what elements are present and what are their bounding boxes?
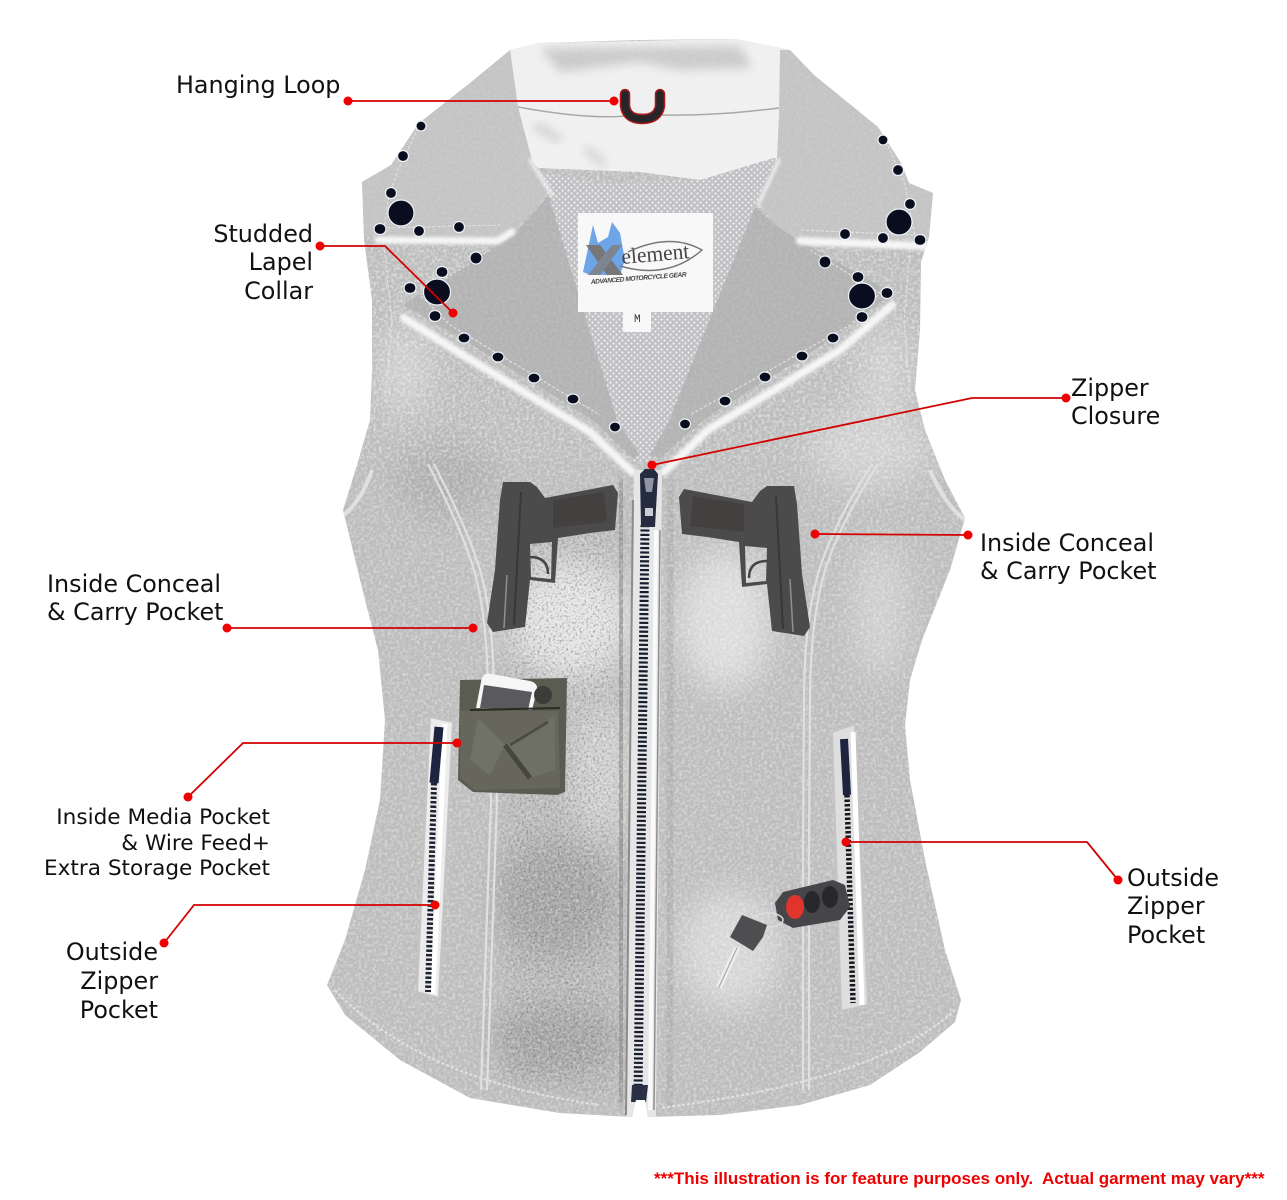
callout: studded lapel collar: Studded	[213, 220, 313, 248]
lapel highlights	[378, 160, 925, 472]
zipper slider	[640, 469, 658, 527]
callout: inside conceal carry pocket right	[810, 529, 1157, 585]
mesh lining	[538, 157, 777, 462]
hanging loop	[625, 94, 660, 119]
callout: studded lapel collar	[213, 220, 458, 318]
callout: inside media pocket: Inside Media Pocket	[56, 805, 270, 830]
collar back and inner band	[510, 39, 790, 180]
callout: studded lapel collar: Collar	[244, 277, 313, 305]
callout: outside zipper pocket right: Pocket	[1127, 921, 1205, 949]
callout: inside conceal carry pocket right: & Carry Pocket	[980, 557, 1157, 585]
callout: inside media pocket	[44, 738, 462, 881]
upper collar right	[760, 50, 933, 238]
brand label: element	[620, 238, 690, 269]
callout: inside conceal carry pocket left: Inside Conceal	[47, 570, 221, 598]
left handgun	[487, 482, 618, 632]
brand label: ADVANCED MOTORCYCLE GEAR	[590, 271, 687, 286]
right zipper pocket	[832, 724, 868, 1011]
callout: inside conceal carry pocket left	[47, 570, 478, 632]
callout: hanging loop: Hanging Loop	[176, 71, 340, 99]
callout: inside media pocket: Extra Storage Pocket	[44, 856, 270, 881]
right lapel	[650, 207, 893, 458]
vest illustration	[320, 30, 970, 1125]
size tag: M	[634, 314, 641, 326]
callout: outside zipper pocket left: Zipper	[80, 967, 158, 995]
callout: outside zipper pocket right: Outside	[1127, 864, 1219, 892]
callout: studded lapel collar: Lapel	[249, 248, 313, 276]
callout: outside zipper pocket right	[842, 838, 1219, 949]
studs	[374, 121, 926, 432]
upper collar left	[362, 50, 552, 238]
callout: inside media pocket: & Wire Feed+	[121, 831, 270, 856]
callout: zipper closure: Closure	[1071, 402, 1160, 430]
key fob and key	[719, 880, 850, 987]
callout: outside zipper pocket left: Pocket	[80, 996, 158, 1024]
brand label	[578, 213, 713, 332]
callout: zipper closure: Zipper	[1071, 374, 1149, 402]
callout: outside zipper pocket right: Zipper	[1127, 892, 1205, 920]
left zipper pocket	[417, 717, 453, 998]
princess seams	[335, 464, 965, 1108]
callout: outside zipper pocket left	[66, 900, 440, 1024]
disclaimer: ***This illustration is for feature purposes only. Actual garment may vary***	[654, 1169, 1265, 1188]
callout: zipper closure	[648, 374, 1160, 470]
leader line: hanging loop	[344, 96, 618, 106]
inside media pocket with phone	[458, 674, 567, 795]
callout: inside conceal carry pocket left: & Carry Pocket	[47, 598, 224, 626]
callout: inside conceal carry pocket right: Inside Conceal	[980, 529, 1154, 557]
callout: outside zipper pocket left: Outside	[66, 938, 158, 966]
center front zipper	[626, 470, 662, 1118]
left lapel	[403, 192, 640, 458]
vest body	[320, 30, 970, 1125]
right handgun	[679, 486, 810, 636]
